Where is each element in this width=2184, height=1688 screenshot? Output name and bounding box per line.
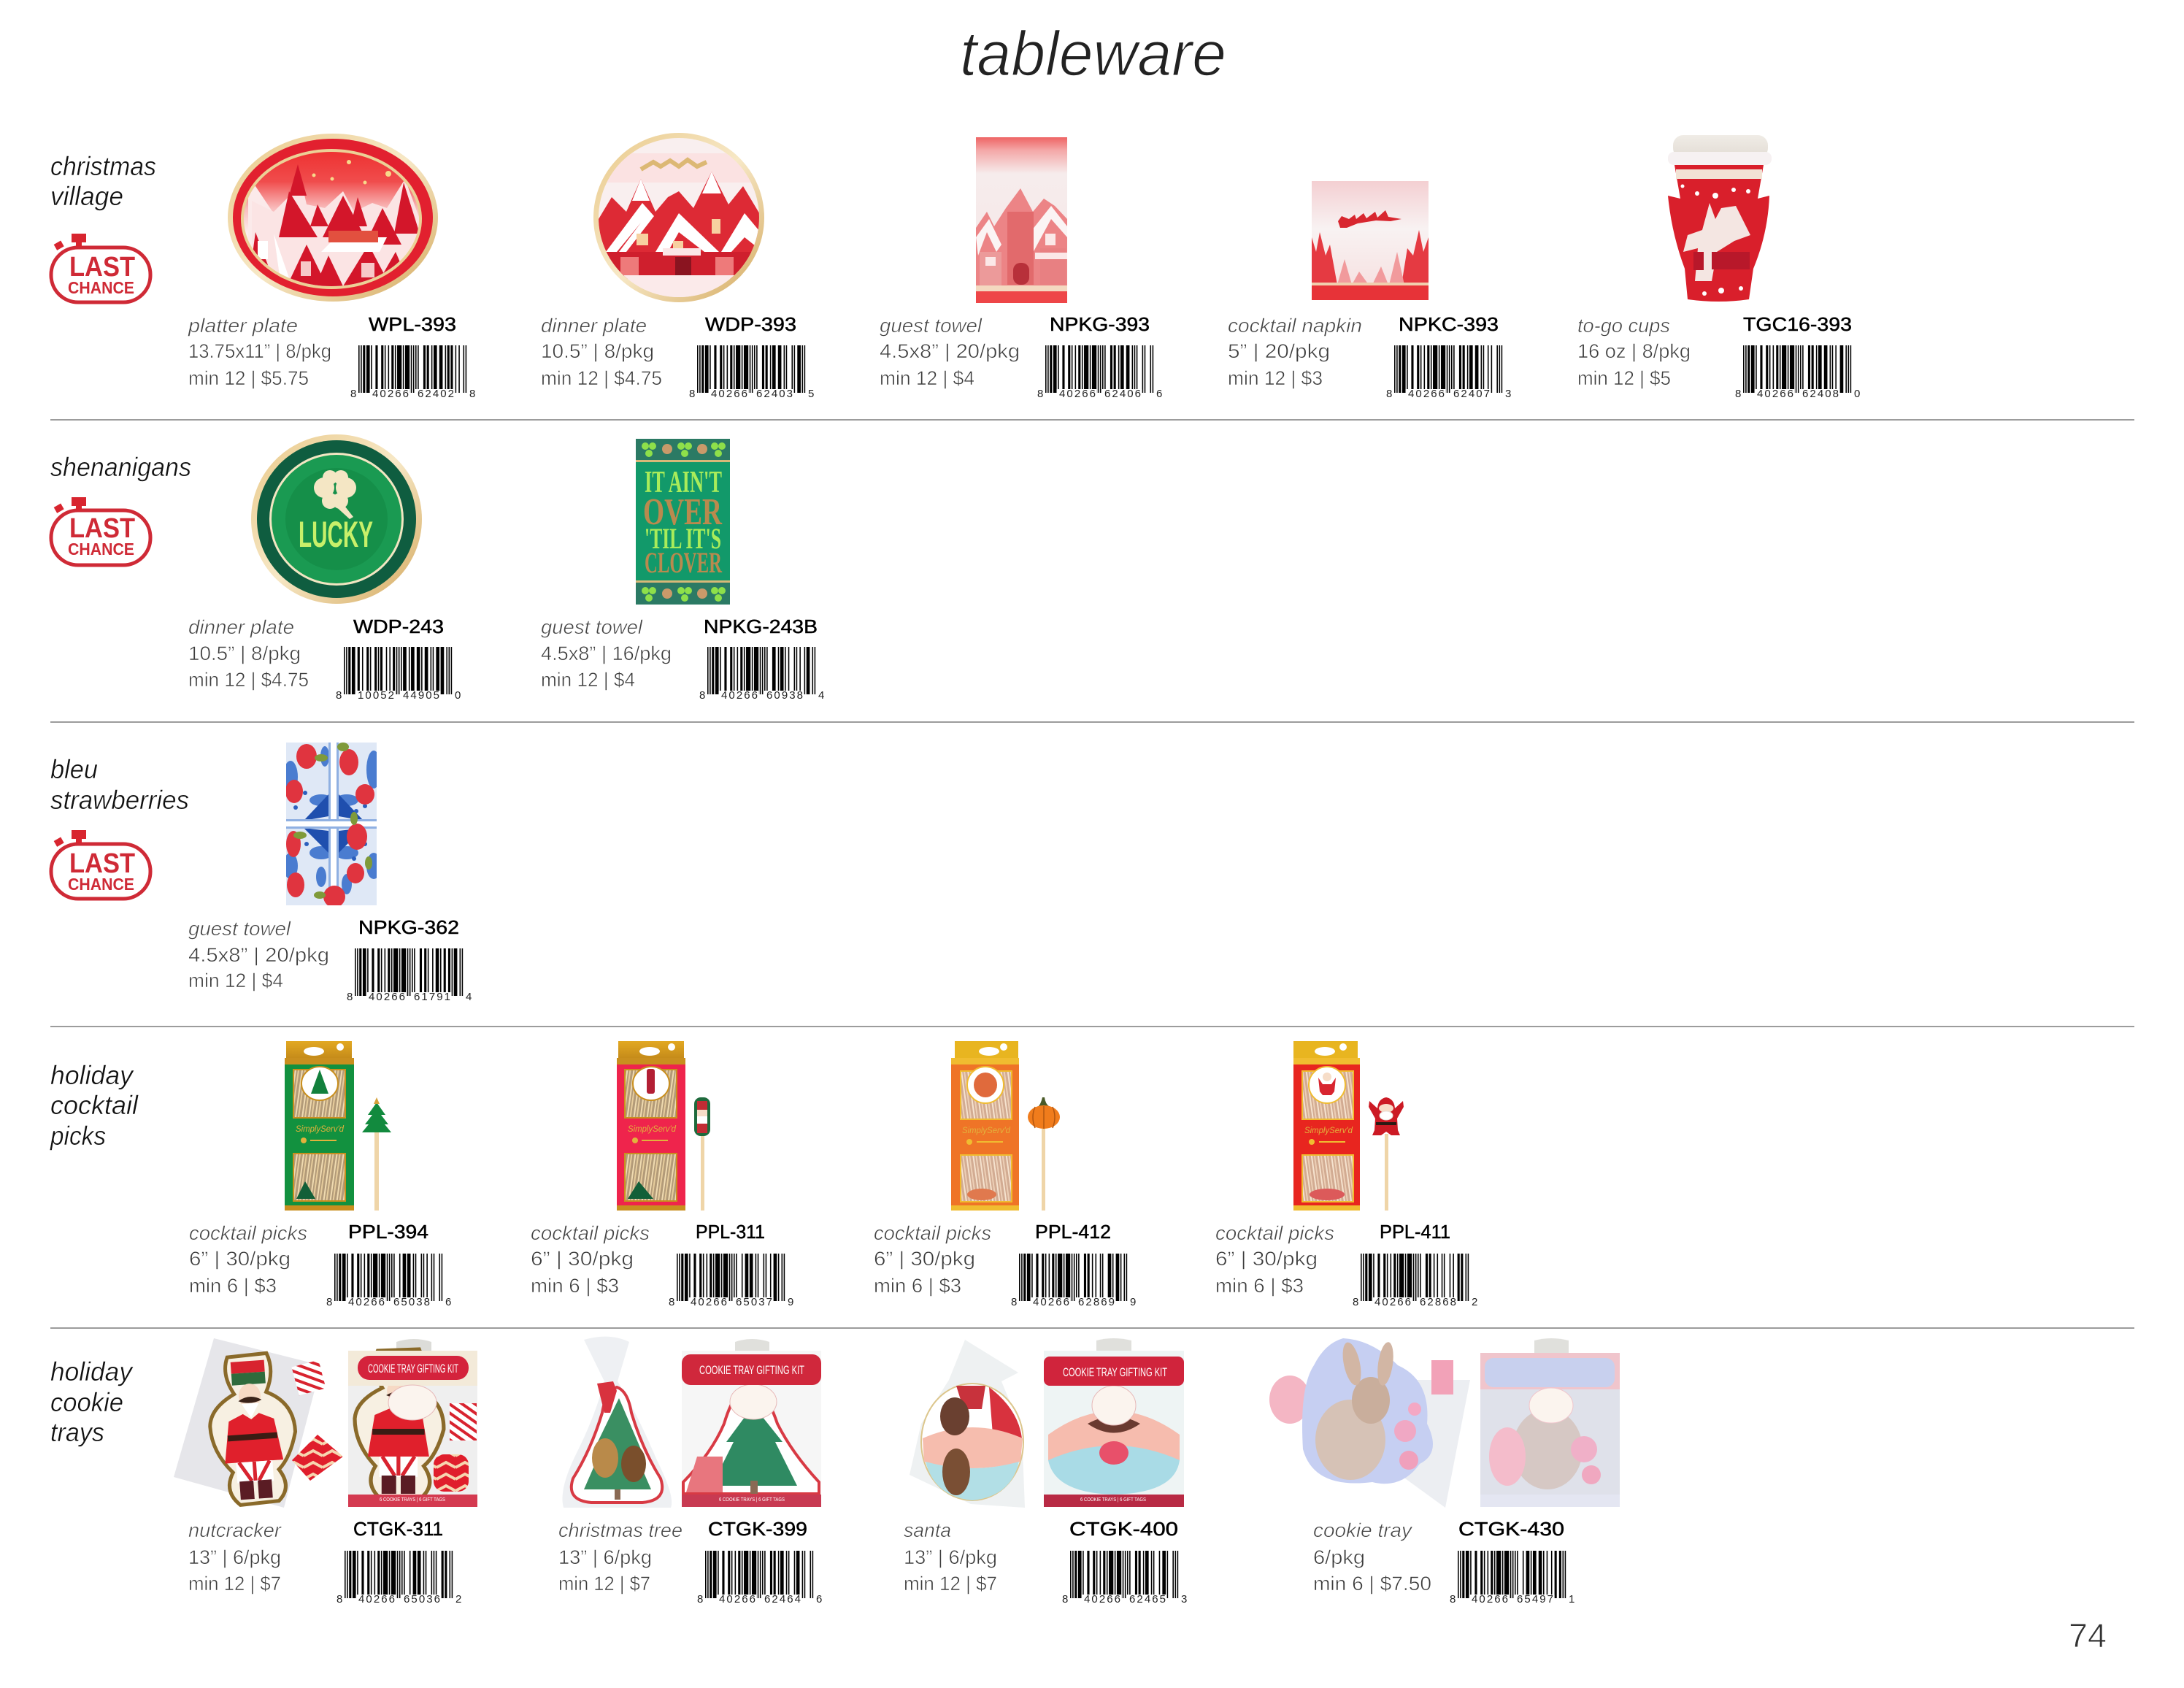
image: christmas tree kit box (682, 1339, 821, 1507)
product description: 6” | 30/pkg (1215, 1248, 1318, 1270)
product description: platter plate (188, 315, 298, 337)
image: green clover guest towel: 'TIL IT'S (645, 522, 721, 555)
product description (188, 918, 329, 991)
barcode (1062, 1574, 1187, 1605)
product description: min 12 | $7 (188, 1573, 281, 1595)
image: guest towel (976, 137, 1067, 303)
sku: TGC16-393 (1743, 313, 1852, 335)
barcode: 8 (699, 689, 705, 702)
image: green clover guest towel (636, 439, 730, 605)
barcode (697, 1574, 822, 1605)
page number: 74 (2069, 1616, 2107, 1654)
sku: NPKG-362 (358, 916, 459, 938)
barcode (1386, 369, 1511, 400)
image: oval platter plate (228, 134, 438, 302)
product description: guest towel (188, 918, 291, 940)
barcode: 62465 (1129, 1593, 1166, 1605)
product description (1313, 1519, 1431, 1595)
icon: tree pick (362, 1097, 391, 1211)
product description: min 6 | $7.50 (1313, 1573, 1431, 1595)
barcode: 40266 (1084, 1593, 1120, 1605)
sku: NPKC-393 (1399, 313, 1499, 335)
product: christmas tree cookie tray CTGK-399 (558, 1337, 822, 1605)
barcode: 65497 (1517, 1593, 1553, 1605)
barcode: 9 (788, 1296, 793, 1308)
badge: last chance: CHANCE (68, 875, 134, 894)
barcode (689, 369, 814, 400)
product description: min 12 | $4.75 (541, 367, 662, 389)
barcode: 62869 (1078, 1296, 1115, 1308)
product description: min 12 | $4 (541, 669, 635, 691)
product description: 6/pkg (1313, 1546, 1365, 1568)
barcode: 61791 (414, 991, 450, 1003)
product description: 6” | 30/pkg (531, 1248, 634, 1270)
barcode (1011, 1278, 1136, 1308)
product description: 4.5x8” | 20/pkg (188, 944, 329, 966)
section label: holiday cocktail picks (50, 1060, 139, 1151)
product description: 5” | 20/pkg (1228, 340, 1330, 362)
product description: 13” | 6/pkg (188, 1546, 281, 1568)
image: green clover guest towel: IT AIN'T (645, 466, 722, 499)
barcode: 8 (1353, 1296, 1358, 1308)
product description: christmas tree (558, 1519, 682, 1541)
product description: min 12 | $7 (904, 1573, 997, 1595)
section label: christmas village: village (50, 181, 123, 211)
barcode (1353, 1278, 1477, 1308)
section: christmas village (50, 133, 1860, 400)
sku: PPL-311 (696, 1221, 765, 1243)
barcode (350, 369, 475, 400)
image: bunny tray (1269, 1338, 1470, 1508)
badge: last chance: LAST (69, 848, 135, 879)
section label: holiday cocktail picks: picks (50, 1121, 106, 1151)
product description: guest towel (541, 616, 643, 638)
product description: min 12 | $4.75 (188, 669, 309, 691)
image: red santa picks box (1293, 1041, 1360, 1211)
image: christmas tree tray in bag (562, 1337, 672, 1508)
barcode: 0 (1854, 388, 1860, 400)
section label: bleu strawberries: bleu (50, 754, 98, 784)
image: green tree picks box (285, 1041, 354, 1211)
product description (188, 1519, 282, 1595)
image: christmas tree kit box: 6 COOKIE TRAYS | 6 GIFT TAGS (719, 1497, 785, 1503)
image: bunny kit box (1480, 1338, 1620, 1507)
product: bunny cookie tray CTGK-430 (1269, 1338, 1620, 1605)
product description (874, 1222, 991, 1297)
image: strawberry tile guest towel (283, 743, 381, 908)
product description: min 6 | $3 (1215, 1275, 1304, 1297)
barcode: 62464 (764, 1593, 801, 1605)
sku: NPKG-243B (704, 615, 818, 637)
section label: shenanigans: shenanigans (50, 452, 191, 482)
section label: christmas village (50, 151, 156, 211)
sku: CTGK-400 (1069, 1518, 1178, 1540)
sku: PPL-394 (348, 1221, 428, 1243)
product: cocktail picks PPL-394 (189, 1041, 451, 1308)
image: red santa picks box: SimplyServ'd (1304, 1125, 1353, 1135)
image: nutcracker tray in bag (174, 1338, 343, 1508)
barcode: 8 (1037, 388, 1043, 400)
barcode: 62868 (1420, 1296, 1456, 1308)
product description: guest towel (880, 315, 983, 337)
product description: cookie tray (1313, 1519, 1413, 1541)
section label: holiday cookie trays (50, 1357, 134, 1447)
barcode: 2 (1472, 1296, 1477, 1308)
barcode: 3 (1181, 1593, 1187, 1605)
product: guest towel NPKG-362 (188, 743, 472, 1003)
product: platter plate WPL-393 (188, 134, 475, 400)
barcode: 8 (469, 388, 475, 400)
image: santa kit box (1044, 1338, 1184, 1507)
image: round dinner plate (593, 133, 764, 302)
product description: cocktail picks (874, 1222, 991, 1244)
icon: pumpkin pick (1028, 1097, 1060, 1211)
image: red nutcracker picks box: SimplyServ'd (628, 1124, 676, 1134)
barcode: 65037 (736, 1296, 772, 1308)
product description: nutcracker (188, 1519, 282, 1541)
image: red nutcracker picks box (617, 1041, 685, 1211)
product description: 4.5x8” | 16/pkg (541, 642, 672, 664)
image: christmas tree kit box: COOKIE TRAY GIFTING KIT (699, 1363, 804, 1377)
barcode: 5 (808, 388, 814, 400)
barcode: 40266 (721, 689, 758, 702)
barcode: 8 (326, 1296, 332, 1308)
product description: 13” | 6/pkg (904, 1546, 997, 1568)
product description: 4.5x8” | 20/pkg (880, 340, 1020, 362)
product: cocktail picks PPL-411 (1215, 1041, 1477, 1308)
product description: 10.5” | 8/pkg (541, 340, 654, 362)
barcode: 8 (336, 689, 342, 702)
barcode: 40266 (1374, 1296, 1411, 1308)
product description: 13.75x11” | 8/pkg (188, 340, 331, 362)
barcode (1037, 369, 1162, 400)
image: green lucky plate: LUCKY (299, 514, 373, 555)
product description: 6” | 30/pkg (874, 1248, 975, 1270)
icon: shamrock (314, 470, 356, 519)
barcode (337, 1574, 461, 1605)
barcode: 9 (1130, 1296, 1136, 1308)
barcode: 0 (455, 689, 461, 702)
image: nutcracker kit box: COOKIE TRAY GIFTING KIT (368, 1362, 458, 1376)
barcode: 62406 (1104, 388, 1141, 400)
product description: 10.5” | 8/pkg (188, 642, 301, 664)
barcode (699, 670, 824, 702)
section label: holiday cocktail picks: cocktail (50, 1090, 139, 1120)
image: green tree picks box: SimplyServ'd (296, 1124, 344, 1134)
barcode: 8 (1062, 1593, 1068, 1605)
barcode (669, 1278, 793, 1308)
product description: cocktail picks (1215, 1222, 1334, 1244)
barcode: 40266 (358, 1593, 395, 1605)
section label: holiday cookie trays: trays (50, 1417, 104, 1447)
barcode: 3 (1505, 388, 1511, 400)
image: to-go cup with sleeve (1668, 135, 1772, 302)
title: tableware (960, 19, 1226, 89)
barcode: 8 (337, 1593, 342, 1605)
image: santa kit box: COOKIE TRAY GIFTING KIT (1063, 1365, 1167, 1379)
section label: bleu strawberries (50, 754, 189, 815)
barcode: 40266 (369, 991, 405, 1003)
barcode: 8 (1011, 1296, 1017, 1308)
image: santa kit box: 6 COOKIE TRAYS | 6 GIFT TAGS (1080, 1497, 1146, 1503)
product description: min 12 | $4 (188, 970, 283, 991)
sku: CTGK-399 (708, 1518, 807, 1540)
barcode: 62403 (756, 388, 793, 400)
barcode: 40266 (1059, 388, 1096, 400)
product description: cocktail picks (531, 1222, 650, 1244)
barcode: 2 (455, 1593, 461, 1605)
product description: to-go cups (1577, 315, 1670, 337)
barcode: 40266 (691, 1296, 727, 1308)
product description (558, 1519, 682, 1595)
barcode (326, 1278, 451, 1308)
sku: WDP-393 (705, 313, 796, 335)
product description: 16 oz | 8/pkg (1577, 340, 1691, 362)
section label: bleu strawberries: strawberries (50, 785, 189, 815)
barcode (1735, 369, 1860, 400)
section label: christmas village: christmas (50, 151, 156, 181)
product description (904, 1519, 997, 1595)
product description (1215, 1222, 1334, 1297)
product: dinner plate WDP-243 (188, 434, 461, 702)
product description: min 6 | $3 (531, 1275, 619, 1297)
product description (188, 616, 309, 691)
barcode: 8 (1386, 388, 1392, 400)
sku: WPL-393 (369, 313, 456, 335)
product: santa cookie tray CTGK-400 (904, 1338, 1187, 1605)
barcode: 65036 (404, 1593, 440, 1605)
barcode (1450, 1574, 1574, 1605)
barcode: 8 (1735, 388, 1741, 400)
barcode: 8 (689, 388, 695, 400)
image: cocktail napkin (1312, 181, 1429, 300)
barcode: 40266 (711, 388, 747, 400)
image: orange pumpkin picks box (951, 1041, 1019, 1211)
badge: last chance: LAST (69, 513, 135, 544)
barcode: 8 (669, 1296, 674, 1308)
product description (188, 315, 331, 389)
barcode: 6 (816, 1593, 822, 1605)
product description (541, 315, 662, 389)
barcode (336, 670, 461, 702)
image: orange pumpkin picks box: SimplyServ'd (962, 1125, 1010, 1135)
barcode: 62408 (1802, 388, 1839, 400)
badge: last chance (51, 234, 150, 302)
product: to-go cups TGC16-393 (1577, 135, 1860, 400)
barcode: 40266 (348, 1296, 385, 1308)
badge: last chance (51, 830, 150, 899)
sku: PPL-412 (1035, 1221, 1111, 1243)
product description: santa (904, 1519, 951, 1541)
product description (1228, 315, 1362, 389)
image: nutcracker kit box (348, 1339, 477, 1507)
section: holiday cookie trays (50, 1337, 1620, 1605)
product description: min 12 | $3 (1228, 367, 1323, 389)
section: shenanigans (50, 434, 824, 702)
barcode: 1 (1569, 1593, 1574, 1605)
barcode: 8 (350, 388, 356, 400)
badge: last chance: CHANCE (68, 278, 134, 297)
icon: santa pick (1369, 1097, 1404, 1211)
section: holiday cocktail picks (50, 1041, 1477, 1308)
product description: min 12 | $4 (880, 367, 974, 389)
image: green lucky plate (251, 434, 422, 604)
barcode: 6 (445, 1296, 451, 1308)
product: guest towel NPKG-393 (880, 137, 1162, 400)
badge: last chance: CHANCE (68, 540, 134, 559)
product description (531, 1222, 650, 1297)
image: nutcracker kit box: 6 COOKIE TRAYS | 6 GIFT TAGS (380, 1497, 445, 1503)
image: green clover guest towel: OVER (643, 491, 723, 533)
barcode: 8 (347, 991, 353, 1003)
barcode: 40266 (1408, 388, 1445, 400)
barcode: 10052 (358, 689, 394, 702)
product: cocktail napkin NPKC-393 (1228, 181, 1511, 400)
section label: holiday cocktail picks: holiday (50, 1060, 134, 1090)
barcode: 40266 (1472, 1593, 1508, 1605)
product description: min 12 | $5.75 (188, 367, 309, 389)
section: bleu strawberries (50, 743, 472, 1003)
barcode: 40266 (1757, 388, 1793, 400)
product: dinner plate WDP-393 (541, 133, 814, 400)
product description: cocktail napkin (1228, 315, 1362, 337)
product description (1577, 315, 1691, 389)
barcode: 65038 (393, 1296, 430, 1308)
barcode: 8 (1450, 1593, 1456, 1605)
product description (541, 616, 672, 691)
product description: dinner plate (541, 315, 647, 337)
product description (880, 315, 1020, 389)
barcode: 44905 (403, 689, 439, 702)
product description: min 12 | $7 (558, 1573, 650, 1595)
product description: dinner plate (188, 616, 294, 638)
product description: cocktail picks (189, 1222, 307, 1244)
barcode: 40266 (719, 1593, 755, 1605)
badge: last chance: LAST (69, 252, 135, 283)
sku: NPKG-393 (1050, 313, 1150, 335)
sku: WDP-243 (353, 615, 444, 637)
image: green clover guest towel: CLOVER (645, 546, 723, 579)
barcode (347, 972, 472, 1003)
barcode: 40266 (1033, 1296, 1069, 1308)
sku: PPL-411 (1380, 1221, 1450, 1243)
barcode: 62407 (1453, 388, 1490, 400)
product description: 13” | 6/pkg (558, 1546, 652, 1568)
product description: min 6 | $3 (874, 1275, 961, 1297)
product: cocktail picks PPL-412 (874, 1041, 1136, 1308)
product description: min 12 | $5 (1577, 367, 1671, 389)
product: cocktail picks PPL-311 (531, 1041, 793, 1308)
section label: holiday cookie trays: holiday (50, 1357, 134, 1386)
badge: last chance (51, 497, 150, 565)
product description (189, 1222, 307, 1297)
sku: CTGK-311 (353, 1518, 443, 1540)
product description: min 6 | $3 (189, 1275, 277, 1297)
barcode: 6 (1156, 388, 1162, 400)
barcode: 40266 (372, 388, 409, 400)
barcode: 60938 (766, 689, 803, 702)
barcode: 4 (466, 991, 472, 1003)
product: nutcracker cookie tray CTGK-311 (174, 1338, 477, 1605)
icon: nutcracker pick (694, 1097, 710, 1211)
section label: holiday cookie trays: cookie (50, 1387, 123, 1417)
barcode: 62402 (418, 388, 454, 400)
image: santa tray in bag (910, 1340, 1025, 1508)
barcode: 8 (697, 1593, 703, 1605)
barcode: 4 (818, 689, 824, 702)
product: guest towel NPKG-243B (541, 439, 824, 702)
sku: CTGK-430 (1458, 1518, 1564, 1540)
product description: 6” | 30/pkg (189, 1248, 291, 1270)
